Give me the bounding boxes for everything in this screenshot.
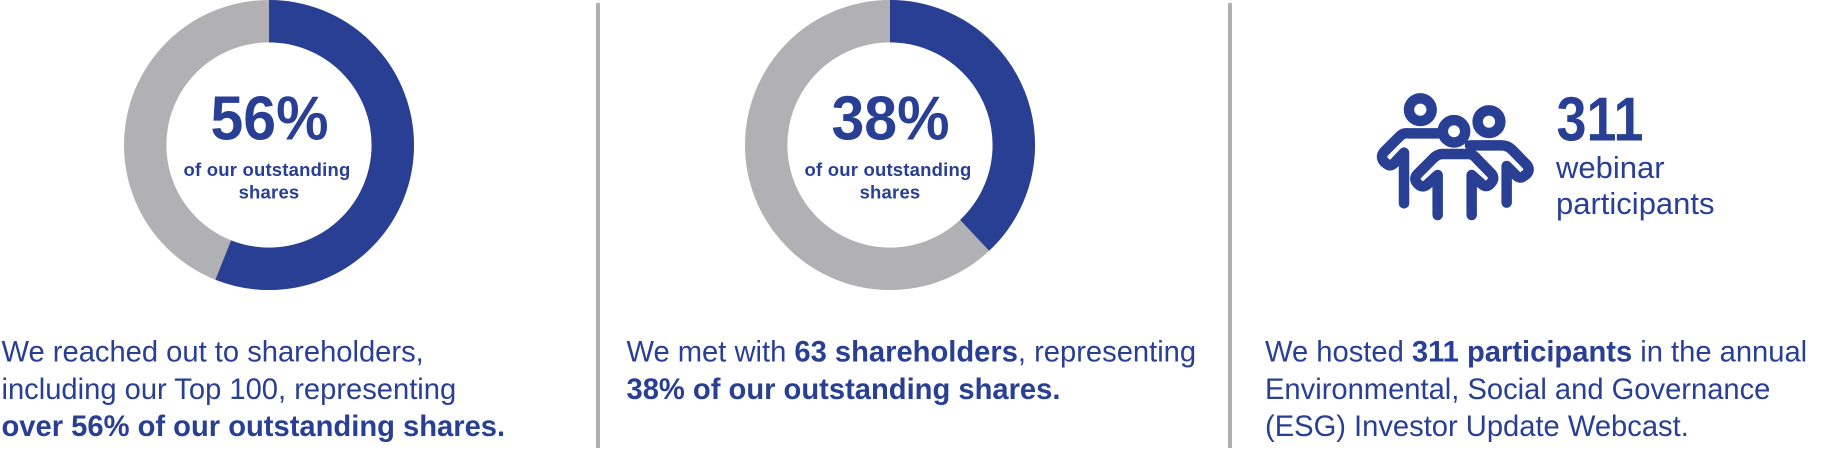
donut value: 38%: 38%	[832, 84, 950, 154]
stat caption: participants	[1556, 186, 1715, 221]
donut caption: shares	[860, 182, 920, 202]
text block: outreach description: over 56% of our outstanding shares.	[2, 411, 505, 443]
panel: 56% outreach	[2, 21, 505, 443]
donut caption: of our outstanding	[805, 159, 971, 180]
panel: webinar participants	[1265, 86, 1807, 443]
donut chart: 38%	[766, 21, 1014, 269]
stat: 311: 311	[1556, 86, 1644, 154]
text block: meetings description: We met with 63 shareholders, representing	[626, 336, 1196, 368]
text block: outreach description: including our Top 100, representing	[2, 374, 456, 406]
text block: webinar description: (ESG) Investor Update Webcast.	[1265, 411, 1689, 443]
text block: webinar description: Environmental, Social and Governance	[1265, 374, 1770, 406]
stat caption: webinar	[1556, 150, 1665, 185]
donut value: 56%: 56%	[210, 84, 328, 154]
donut caption: shares	[239, 182, 299, 202]
icon: three people	[1382, 98, 1529, 215]
donut caption: of our outstanding	[184, 159, 350, 180]
text block: meetings description: 38% of our outstanding shares.	[626, 374, 1060, 406]
panel: 38% meetings	[626, 21, 1196, 406]
text block: webinar description: We hosted 311 participants in the annual	[1265, 336, 1807, 368]
text block: outreach description: We reached out to shareholders,	[2, 336, 424, 368]
donut chart: 56%	[145, 21, 393, 269]
